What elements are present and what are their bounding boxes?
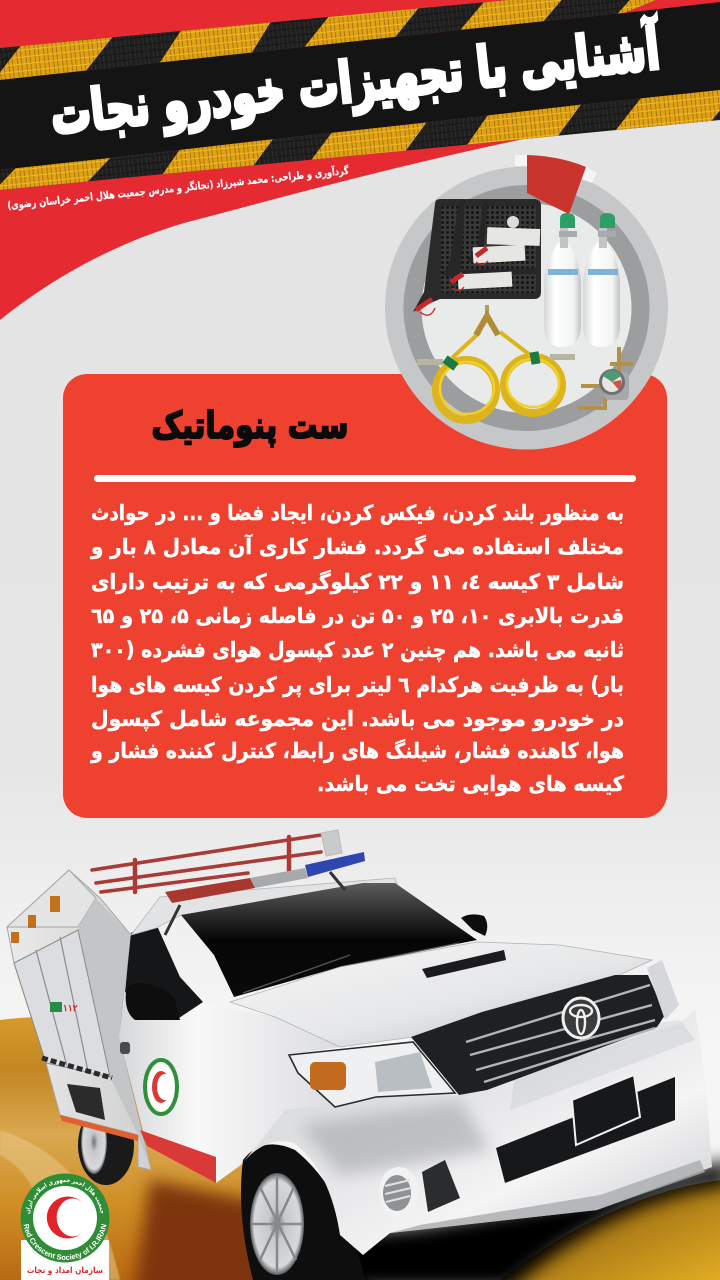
hood	[230, 942, 652, 1047]
description text: ثانیه می باشد. هم چنین ۲ عدد کپسول هوای فشرده (۳۰۰	[91, 638, 624, 662]
black title band	[0, 2, 720, 170]
description text: شامل ۳ کیسه ٤، ۱۱ و ۲۲ کیلوگرمی که به ترتیب دارای	[91, 569, 624, 594]
truck shadow	[300, 1160, 720, 1280]
organisation name: سازمان امداد و نجات	[27, 1266, 103, 1276]
red header wedge	[0, 0, 720, 320]
wipers	[243, 943, 459, 993]
ring text: Persian: جمعیت هلال احمر جمهوری اسلامی ایران	[26, 1180, 103, 1214]
author credit: گردآوری و طراحی: محمد شیرزاد (نجاتگر و مدرس جمعیت هلال احمر خراسان رضوی)	[7, 164, 350, 212]
cab roof	[131, 878, 400, 935]
hood scoop	[422, 950, 506, 978]
ring text: English: Red Crescent Society of I.R.IRAN	[24, 1224, 106, 1260]
grille	[411, 975, 665, 1095]
icon: air bags	[413, 199, 541, 315]
rescue truck	[7, 830, 720, 1280]
panel: description	[63, 374, 667, 818]
description text: مختلف استفاده می گردد. فشار کاری آن معادل ۸ بار و	[90, 534, 624, 559]
description text: بار) به ظرفیت هرکدام ٦ لیتر برای پر کردن کیسه های هوا	[91, 673, 624, 697]
door handle	[120, 1042, 130, 1054]
emergency light bar	[165, 852, 365, 935]
heading rule	[94, 475, 636, 482]
cab side and door	[119, 992, 340, 1183]
description text: هوا، کاهنده فشار، شیلنگ های رابط، کنترل کننده فشار و	[90, 738, 624, 763]
panel heading: ست پنوماتیک	[152, 404, 348, 447]
right headlight	[647, 960, 679, 1020]
icon: grille badge	[563, 998, 599, 1038]
lower grille	[496, 1077, 675, 1183]
box number: ۱۱۲	[63, 1003, 78, 1013]
bumper shading	[300, 1020, 705, 1233]
description text: به منظور بلند کردن، فیکس کردن، ایجاد فضا و ... در حوادث	[91, 501, 624, 525]
windshield	[181, 883, 477, 997]
equipment circle	[385, 155, 668, 450]
description text: کیسه های هوایی تخت می باشد.	[317, 772, 625, 796]
side mirror	[126, 983, 180, 1020]
icon: air cylinders	[544, 213, 620, 347]
description text: در خودرو موجود می باشد. این مجموعه شامل کپسول	[91, 707, 624, 731]
front wheel	[241, 1144, 365, 1280]
door emblem	[145, 1060, 177, 1114]
icon: yellow hoses	[417, 305, 575, 420]
roof rack	[92, 830, 342, 892]
icon: pressure gauge	[578, 347, 633, 408]
rear wheel	[78, 1105, 134, 1185]
white wedge accent	[515, 155, 597, 183]
description text	[90, 501, 625, 796]
red door stripe	[140, 1130, 216, 1183]
right mirror	[461, 914, 487, 936]
description text: قدرت بالابری ۱۰، ۲۵ و ۵۰ تن در فاصله زمانی ۵، ۲۵ و ٦۵	[91, 604, 624, 628]
license plate	[572, 1075, 640, 1145]
side window	[125, 927, 203, 1020]
hazard tape: lower	[0, 90, 720, 190]
front fascia	[241, 1010, 712, 1255]
fog lamp	[379, 1160, 460, 1217]
hazard tape: upper	[0, 0, 656, 80]
rear compartment	[7, 870, 151, 1170]
logo: Red Crescent	[20, 1174, 110, 1280]
red wedge	[527, 155, 586, 214]
crescent	[47, 1196, 83, 1239]
desert ground	[0, 1017, 720, 1280]
headlight	[289, 1042, 455, 1107]
